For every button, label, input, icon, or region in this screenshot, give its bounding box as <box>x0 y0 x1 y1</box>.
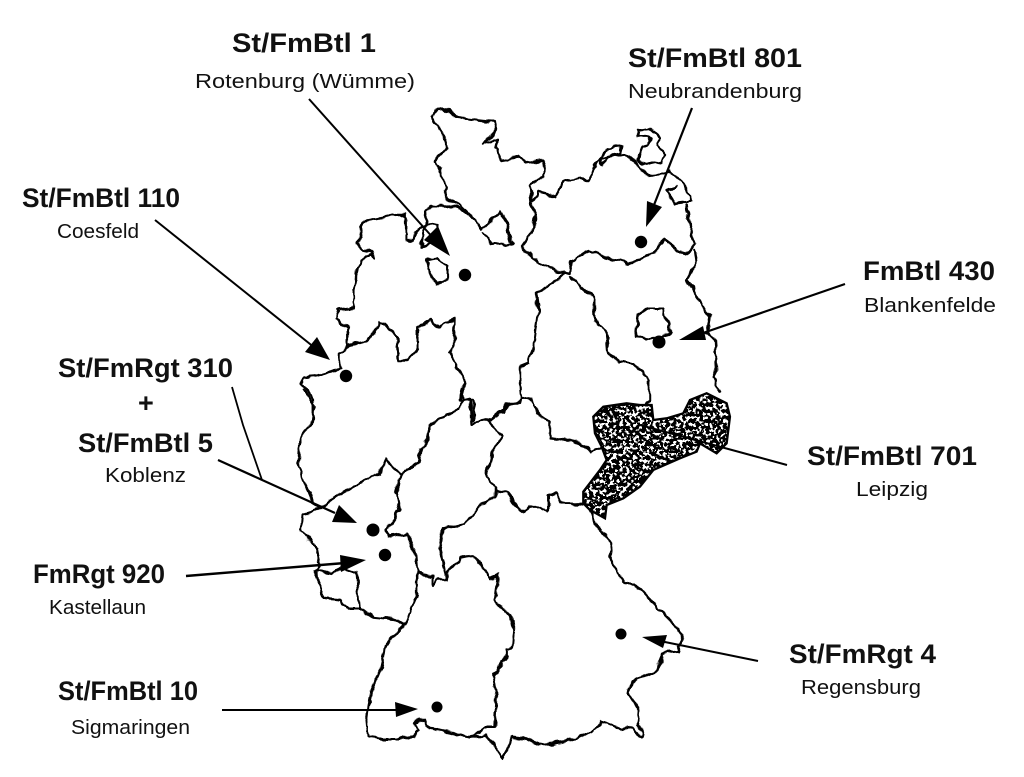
line: St/FmRgt 310 leader <box>232 387 262 480</box>
arrow: Kastellaun <box>186 555 366 576</box>
Mecklenburg-Vorpommern outline <box>532 147 697 273</box>
label: St/FmBtl 10: Sigmaringen <box>71 717 190 739</box>
Bremerhaven enclave outline <box>427 258 448 283</box>
map: Germany south states <box>298 390 682 758</box>
arrow: Regensburg <box>642 635 758 661</box>
arrow: Coesfeld <box>155 220 330 360</box>
label: St/FmBtl 110: Coesfeld <box>57 221 139 243</box>
label: St/FmRgt 4: Regensburg <box>801 677 921 699</box>
label: St/FmRgt 4 <box>789 639 936 699</box>
label: FmBtl 430: Blankenfelde <box>864 295 996 317</box>
arrow: Sigmaringen <box>222 702 418 717</box>
highlighted state: Saxony <box>582 392 732 520</box>
Hamburg outline <box>482 212 512 245</box>
label: FmRgt 920 <box>33 559 165 619</box>
arrow: Leipzig <box>640 425 787 465</box>
label: St/FmBtl 701 <box>807 441 977 501</box>
label: St/FmBtl 110: St/FmBtl 110 <box>22 183 180 213</box>
label: St/FmBtl 10 <box>58 676 198 739</box>
Thuringia outline <box>487 397 603 513</box>
label: St/FmRgt 310 + St/FmBtl 5: + <box>138 388 154 418</box>
Baden-Wuerttemberg outline <box>367 555 515 738</box>
arrow: Rotenburg <box>309 99 450 256</box>
Schleswig-Holstein outline <box>433 108 545 247</box>
Saarland outline <box>313 567 360 608</box>
label: St/FmRgt 4: St/FmRgt 4 <box>789 639 936 669</box>
label: FmRgt 920: Kastellaun <box>49 597 146 619</box>
label: St/FmBtl 110 <box>22 183 180 243</box>
arrow: Neubrandenburg <box>646 108 692 227</box>
Berlin outline <box>635 308 670 338</box>
label: St/FmBtl 801: Neubrandenburg <box>628 81 802 103</box>
North Rhine-Westphalia west border <box>298 390 322 508</box>
label: St/FmRgt 310 + St/FmBtl 5: St/FmRgt 310 <box>58 353 233 383</box>
location dots <box>340 236 666 713</box>
Bavaria outline <box>470 510 682 758</box>
label: St/FmRgt 310 + St/FmBtl 5: St/FmBtl 5 <box>78 428 213 458</box>
Hesse and Rhineland-Palatinate outline <box>302 390 493 625</box>
label: St/FmBtl 10: St/FmBtl 10 <box>58 676 198 706</box>
arrow: Koblenz <box>218 460 357 523</box>
label: St/FmBtl 1: Rotenburg (Wümme) <box>195 71 415 93</box>
label: FmBtl 430 <box>863 256 996 317</box>
map: Germany north states <box>302 108 720 420</box>
Bremen outline <box>422 225 438 247</box>
label: St/FmBtl 701: Leipzig <box>856 479 928 501</box>
Brandenburg outline <box>570 250 720 405</box>
arrow: Blankenfelde <box>679 284 845 340</box>
Lower Saxony outline <box>302 205 570 420</box>
label: St/FmBtl 1: St/FmBtl 1 <box>232 28 376 58</box>
label: St/FmBtl 801: St/FmBtl 801 <box>628 43 802 73</box>
label: FmBtl 430: FmBtl 430 <box>863 256 995 286</box>
label: St/FmRgt 310 + St/FmBtl 5 <box>58 353 233 487</box>
label: St/FmBtl 1 <box>195 28 415 93</box>
map: Germany state borders <box>298 108 720 758</box>
Ruegen island outline <box>637 128 665 165</box>
label: St/FmBtl 701: St/FmBtl 701 <box>807 441 977 471</box>
label: St/FmBtl 801 <box>628 43 802 103</box>
label: St/FmRgt 310 + St/FmBtl 5: Koblenz <box>105 465 186 487</box>
label: FmRgt 920: FmRgt 920 <box>33 559 165 589</box>
